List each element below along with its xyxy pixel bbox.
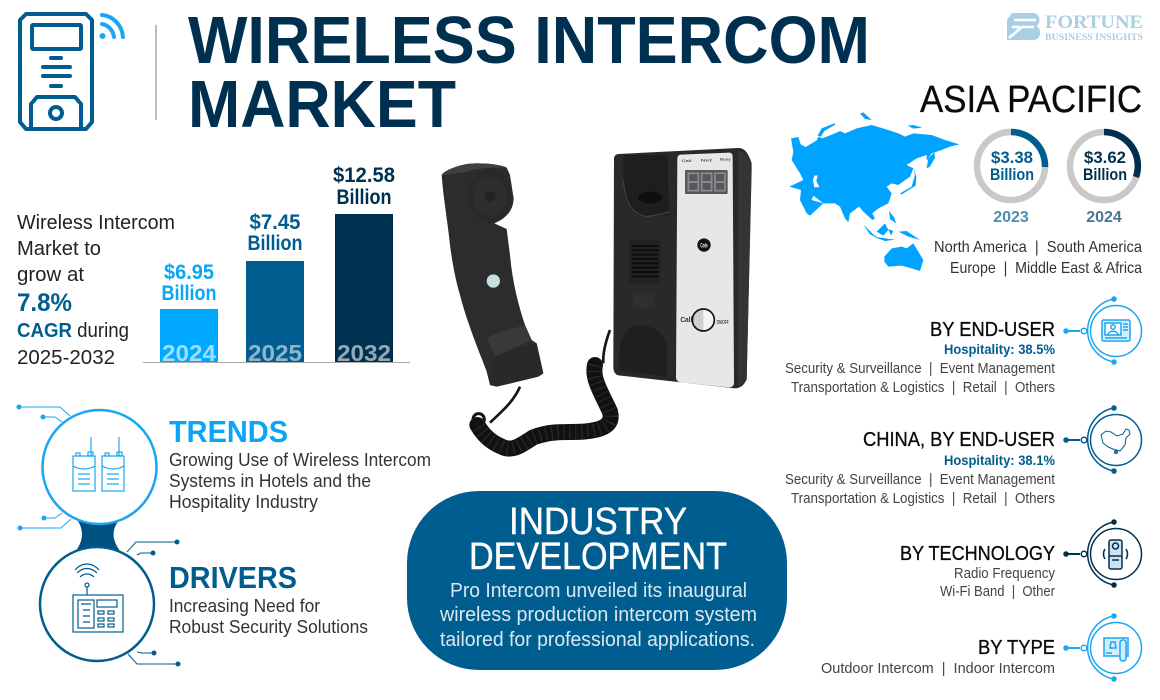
segment: by end-user: BY END-USER <box>930 319 1055 341</box>
icon: end-user ring <box>1064 297 1142 364</box>
text: trends body: Systems in Hotels and the <box>169 471 371 491</box>
bar: 2032 <box>333 164 395 366</box>
segment: by type: BY TYPE <box>978 637 1055 659</box>
segment: China by end-user <box>785 429 1055 507</box>
bar: 2024 <box>160 261 218 366</box>
text: trends body: Hospitality Industry <box>169 492 318 512</box>
base unit: Call <box>682 159 692 163</box>
text: industry development body: wireless production intercom system <box>439 604 757 626</box>
donut: 2023 <box>977 132 1045 226</box>
bar: 2025: $7.45 <box>250 211 301 234</box>
bar: 2025: 2025 <box>248 340 302 366</box>
segment: by technology: Wi-Fi Band | Other <box>940 584 1055 600</box>
text: industry development body <box>439 580 757 651</box>
segment: China by end-user: Hospitality: 38.1% <box>944 452 1055 468</box>
heading: drivers: DRIVERS <box>169 560 297 595</box>
donut: 2023: Billion <box>990 165 1034 184</box>
logo: Fortune Business Insights: FORTUNE <box>1045 12 1143 33</box>
text: trends body <box>169 450 431 512</box>
segment: by end-user: Hospitality: 38.5% <box>944 341 1055 357</box>
bar: 2025: Billion <box>248 232 302 255</box>
segment: by end-user: Security & Surveillance | Event Management <box>785 361 1055 377</box>
bar: 2032: $12.58 <box>333 164 395 187</box>
segment: by type <box>821 637 1055 677</box>
donut: 2024: $3.62 <box>1084 148 1126 167</box>
text: CAGR statement: Market to <box>17 238 101 260</box>
base unit: Net <box>701 158 713 162</box>
base unit: Code <box>700 243 708 249</box>
segment: by technology: Radio Frequency <box>954 566 1056 582</box>
heading: industry development: INDUSTRY <box>509 501 687 543</box>
text: drivers body: Increasing Need for <box>169 596 320 616</box>
bar: 2025 <box>246 211 304 366</box>
panel: trends <box>17 405 431 530</box>
icon: drivers circle with alarm panel <box>40 540 180 666</box>
title: WIRELESS INTERCOM <box>188 3 870 78</box>
logo: Fortune Business Insights <box>1007 12 1143 43</box>
heading: industry development <box>469 501 727 578</box>
title: MARKET <box>188 67 456 142</box>
donut: 2023: 2023 <box>993 209 1029 226</box>
text: CAGR statement: 7.8% <box>17 289 72 317</box>
segment: by technology <box>900 543 1056 600</box>
text: CAGR statement: CAGR during <box>17 320 129 342</box>
text: CAGR statement: Wireless Intercom <box>17 212 175 234</box>
text: drivers body: Robust Security Solutions <box>169 617 368 637</box>
trends and drivers connector <box>72 515 124 556</box>
headline: Asia Pacific: ASIA PACIFIC <box>920 79 1142 121</box>
donut: 2024: 2024 <box>1086 209 1122 226</box>
text: trends body: Growing Use of Wireless Intercom <box>169 450 431 470</box>
panel: industry development <box>407 491 787 670</box>
text: drivers body <box>169 596 368 637</box>
segment: China by end-user: Transportation & Logistics | Retail | Others <box>791 491 1055 507</box>
icon: trends circle with walkie-talkies <box>17 405 156 530</box>
base unit: ON/OFF <box>717 320 729 326</box>
bar: 2024: 2024 <box>162 340 216 366</box>
icon: type ring <box>1064 614 1142 681</box>
bar: 2032: Billion <box>336 186 392 209</box>
title <box>188 3 870 142</box>
coiled cord <box>473 330 611 449</box>
heading: trends: TRENDS <box>169 414 288 449</box>
bar: 2024: Billion <box>162 282 216 305</box>
base unit <box>613 148 752 388</box>
icon: China map ring <box>1064 406 1142 473</box>
map: Caspian Sea <box>813 175 819 187</box>
bar chart: market size <box>143 164 410 366</box>
base unit: Busy <box>720 158 732 162</box>
map: Asia Pacific <box>789 112 959 271</box>
handset <box>442 163 543 387</box>
segment: by end-user: Transportation & Logistics | Retail | Others <box>791 380 1055 396</box>
bar: 2032: 2032 <box>337 340 391 366</box>
segment: by end-user <box>785 319 1055 396</box>
segment: by type: Outdoor Intercom | Indoor Intercom <box>821 661 1055 677</box>
text: CAGR statement <box>17 212 175 369</box>
divider <box>155 25 157 120</box>
logo: Fortune Business Insights: BUSINESS INSIGHTS <box>1045 33 1143 43</box>
text: CAGR statement: 2025-2032 <box>17 347 115 369</box>
donut: 2024 <box>1070 132 1138 226</box>
donut: 2024: Billion <box>1083 165 1127 184</box>
text: industry development body: Pro Intercom unveiled its inaugural <box>450 580 747 602</box>
icon: technology ring <box>1064 520 1142 587</box>
text: CAGR statement: grow at <box>17 264 84 286</box>
donut: 2023: $3.38 <box>991 148 1033 167</box>
segment: China by end-user: Security & Surveillance | Event Management <box>785 472 1055 488</box>
photo: wireless intercom handset and base <box>442 148 752 449</box>
text: other regions <box>934 239 1142 277</box>
text: other regions: North America | South America <box>934 239 1142 256</box>
segment: by technology: BY TECHNOLOGY <box>900 543 1055 565</box>
segment: China by end-user: CHINA, BY END-USER <box>863 429 1055 451</box>
icon: intercom header <box>20 14 123 129</box>
panel: drivers <box>40 540 368 666</box>
bar: 2024: $6.95 <box>164 261 214 284</box>
heading: industry development: DEVELOPMENT <box>469 536 727 578</box>
text: industry development body: tailored for professional applications. <box>440 629 755 651</box>
base unit: Call <box>680 315 692 324</box>
